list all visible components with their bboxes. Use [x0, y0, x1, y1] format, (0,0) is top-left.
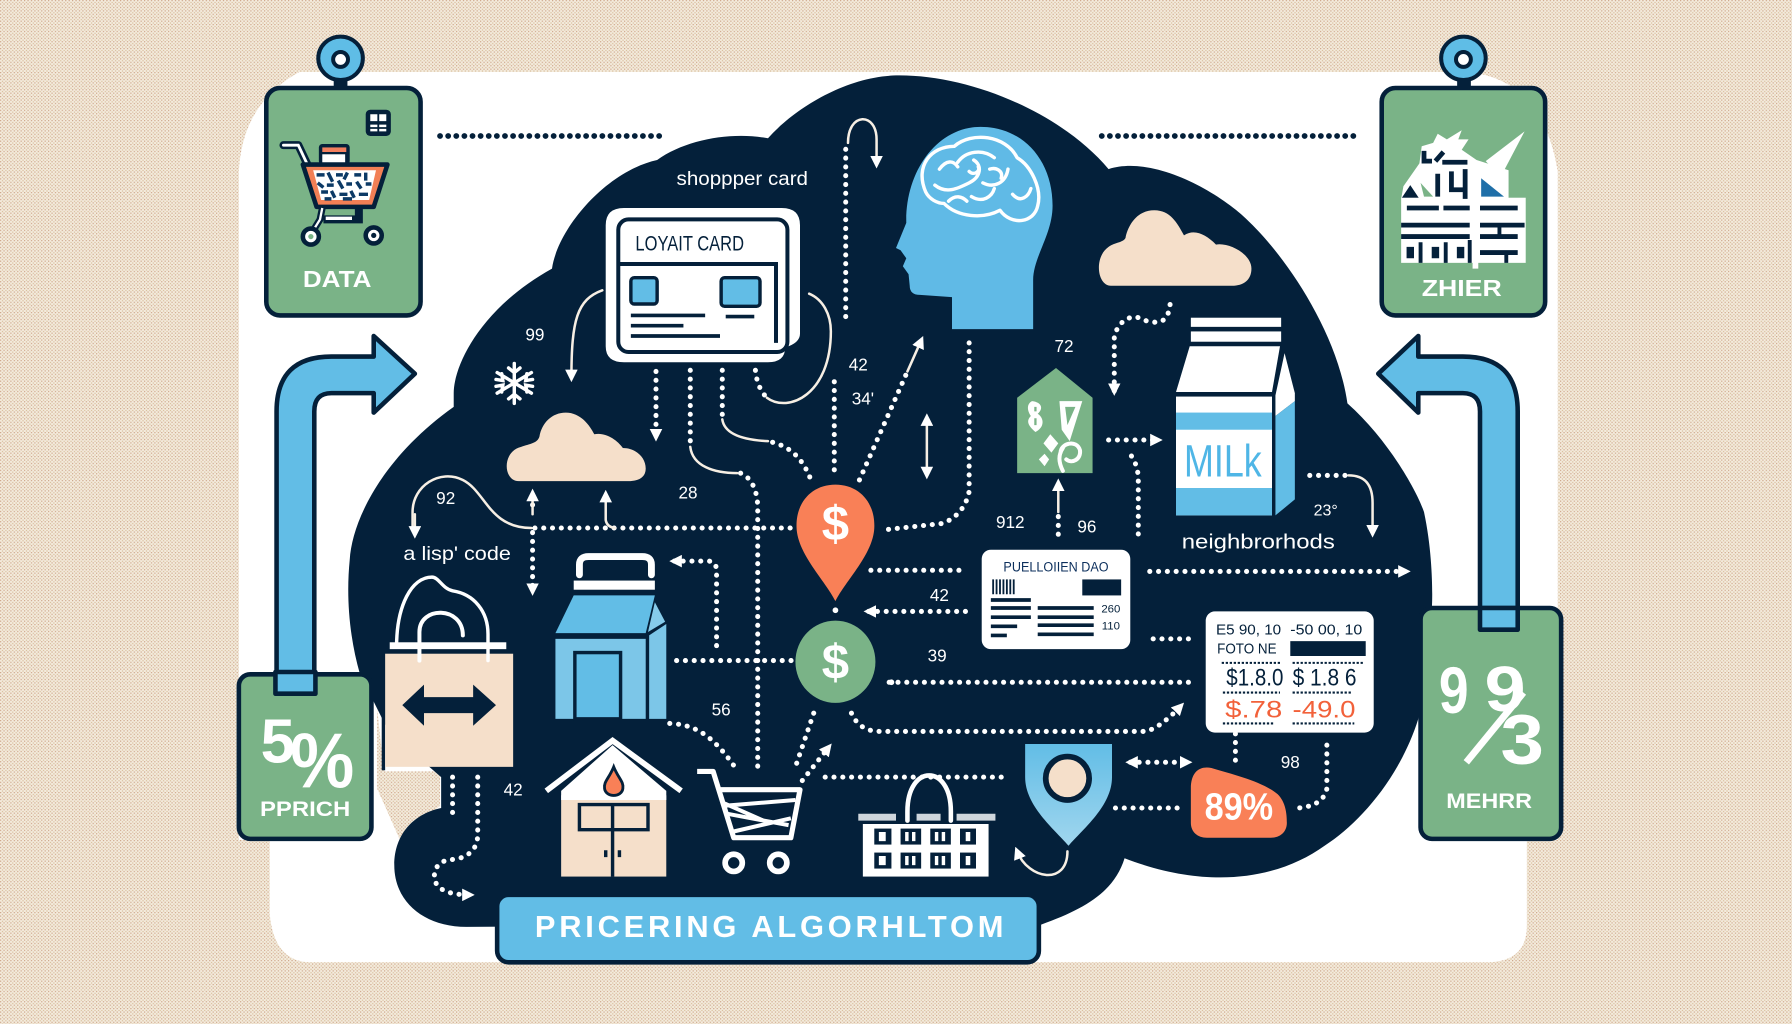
sheet header: E5 90, 10 — [1216, 622, 1281, 638]
sheet header — [1216, 622, 1362, 658]
blue shop — [555, 557, 666, 719]
top dotted line right — [1102, 134, 1361, 138]
title banner: PRICERING ALGORHLTOM — [535, 909, 1003, 944]
orange location pin — [797, 485, 874, 601]
card title: LOYAIT CARD — [635, 230, 744, 255]
receipt small values — [1101, 604, 1120, 633]
right blue arrow — [1378, 336, 1518, 631]
chip right — [721, 278, 760, 306]
window and door — [579, 805, 648, 877]
tag label: DATA — [303, 266, 371, 292]
green dollar circle — [795, 621, 875, 703]
icon: chip — [366, 110, 391, 136]
value digits — [1439, 653, 1544, 779]
percent value: 5 — [261, 707, 295, 776]
brain outline — [922, 137, 1039, 221]
value digits: 9 — [1485, 653, 1526, 725]
tag label: PPRICH — [260, 796, 350, 821]
neighborhoods label: neighbrorhods — [1182, 531, 1335, 554]
dark cloud — [348, 75, 1432, 927]
number: 39: 39 — [928, 646, 947, 666]
receipt lines — [991, 600, 1094, 635]
dotted and solid connector lines — [413, 119, 1406, 895]
icon: shopping cart — [283, 144, 387, 245]
title banner — [497, 895, 1039, 962]
value digits: 9 — [1439, 654, 1469, 728]
loyalty card — [606, 208, 800, 362]
milk label: MILk — [1184, 436, 1262, 487]
number: 42 lower: 42 — [504, 779, 523, 799]
orange percent badge — [1191, 768, 1287, 838]
panel: zhier tag — [1382, 37, 1545, 315]
green dollar circle: $ — [822, 636, 849, 690]
card text lines — [631, 315, 754, 336]
code label: a lisp' code — [403, 543, 511, 565]
arrow base overlap — [275, 672, 315, 694]
barcode — [993, 579, 1014, 594]
window panes — [879, 832, 970, 865]
windows — [874, 829, 976, 869]
tag label: MEHRR — [1446, 788, 1532, 813]
tag body — [266, 88, 421, 315]
chip left — [631, 278, 657, 304]
number: 92: 92 — [436, 488, 455, 508]
cloud left — [507, 413, 646, 481]
bag handles — [397, 577, 488, 661]
sheet orange prices — [1225, 697, 1355, 724]
tag label: ZHIER — [1422, 275, 1502, 301]
number: 23: 23° — [1314, 502, 1338, 519]
arrow base overlap — [1480, 608, 1518, 630]
shopping bag with arrows — [382, 577, 513, 770]
shopping cart white — [697, 771, 800, 871]
number: 28: 28 — [678, 482, 698, 502]
number: 72: 72 — [1054, 336, 1074, 356]
tag body — [1382, 88, 1545, 315]
icon: snowflake — [496, 363, 533, 403]
number: 98: 98 — [1281, 752, 1300, 772]
number: 42 middle: 42 — [930, 585, 949, 605]
cloud right — [1099, 210, 1251, 286]
sheet orange prices: $.78 — [1225, 697, 1282, 724]
shield with circle — [1025, 744, 1112, 846]
pin — [318, 37, 363, 89]
left blue arrow — [277, 336, 415, 694]
tag body — [1421, 608, 1561, 839]
top dotted line left — [440, 134, 665, 138]
beige patch beside bag — [377, 709, 440, 840]
flame — [604, 767, 623, 795]
sheet header: FOTO NE — [1217, 642, 1277, 658]
receipt title: PUELLOIIEN DAO — [1003, 559, 1109, 574]
receipt card — [982, 550, 1130, 649]
tag body — [239, 674, 371, 839]
sheet orange prices: -49.0 — [1293, 697, 1355, 724]
pin — [1441, 37, 1486, 89]
panel: 5% tag — [239, 672, 371, 839]
sheet block — [1290, 641, 1366, 656]
orange percent badge: 89% — [1205, 785, 1273, 827]
milk carton — [1176, 318, 1295, 515]
sheet dark prices: $ 1.8 6 — [1293, 665, 1357, 692]
number: 96: 96 — [1077, 517, 1096, 537]
store building with arch — [858, 775, 995, 877]
price sheet — [1206, 611, 1374, 733]
house — [546, 741, 681, 877]
value digits: 3 — [1501, 700, 1544, 779]
number: 34: 34' — [852, 389, 874, 409]
white panel — [239, 72, 1558, 962]
head with brain — [896, 127, 1053, 329]
number: 42 upper: 42 — [849, 354, 868, 374]
double arrow — [402, 685, 496, 726]
black block — [1082, 579, 1121, 595]
percent value — [261, 707, 354, 804]
green price tag house — [1017, 368, 1093, 473]
number: 912: 912 — [996, 512, 1025, 532]
receipt small values: 110 — [1102, 621, 1120, 633]
percent value: % — [290, 718, 354, 804]
shopper card label: shoppper card — [677, 168, 808, 190]
receipt small values: 260 — [1101, 604, 1120, 616]
panel: data tag — [266, 37, 421, 315]
sheet dark prices — [1226, 665, 1357, 692]
icon: maze building — [1401, 130, 1526, 269]
sheet header: -50 00, 10 — [1290, 622, 1362, 638]
number: 99: 99 — [525, 325, 544, 345]
sheet dark prices: $1.8.0 — [1226, 665, 1283, 692]
sheet micro lines — [1222, 663, 1363, 723]
panel: 93 tag — [1421, 608, 1561, 839]
number: 56: 56 — [712, 699, 731, 719]
orange location pin: $ — [822, 498, 849, 552]
